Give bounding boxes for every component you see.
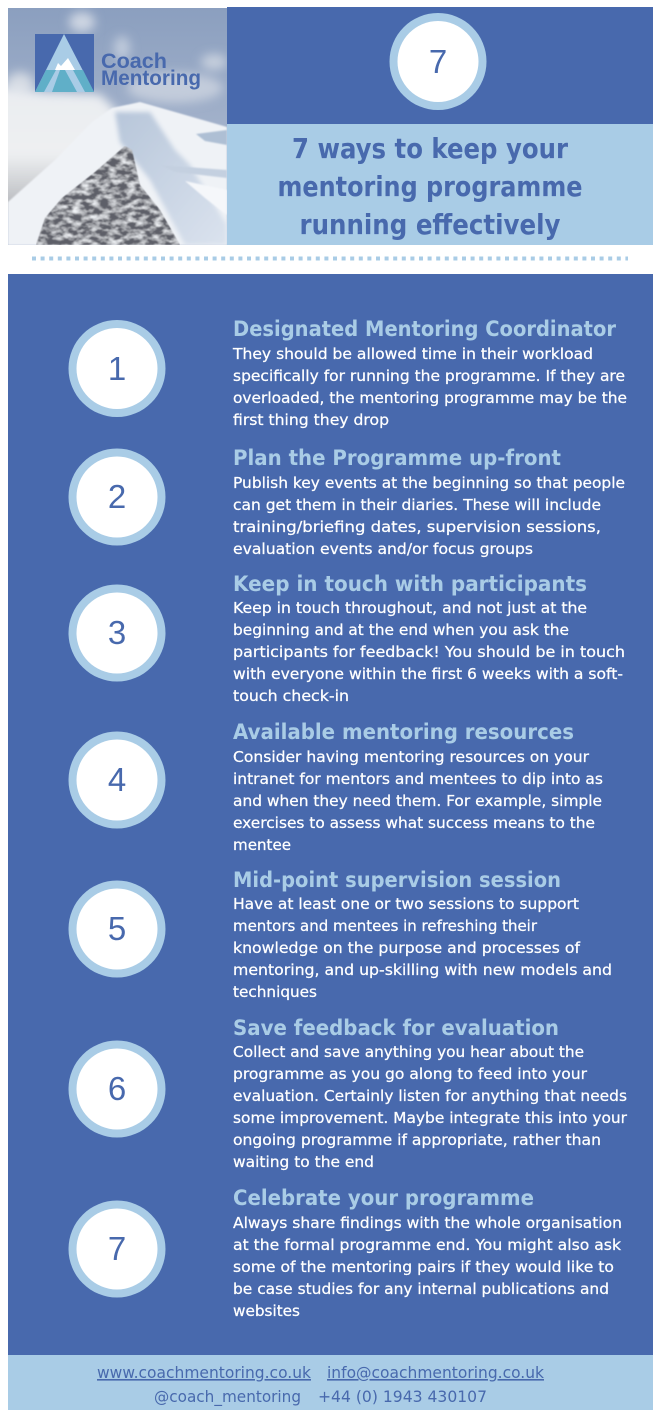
item 2 [68, 446, 625, 558]
item 1: They should be allowed time in their workload [232, 345, 593, 363]
item 2: Publish key events at the beginning so that people [233, 474, 625, 492]
item 1: specifically for running the programme. If they are [233, 367, 625, 385]
logo: Coach Mentoring [35, 34, 201, 92]
logo mark [35, 34, 94, 92]
item 7: Always share findings with the whole organisation [233, 1214, 622, 1232]
item 3: Keep in touch with participants [233, 572, 587, 597]
item 6: evaluation. Certainly listen for anything that needs [233, 1087, 627, 1105]
item 7: Celebrate your programme [233, 1186, 534, 1211]
item 4: Available mentoring resources [233, 720, 574, 745]
footer contacts: info@coachmentoring.co.uk [327, 1363, 545, 1382]
logo wordmark: Mentoring [101, 67, 201, 90]
logo wordmark [101, 50, 201, 90]
item 1: overloaded, the mentoring programme may be the [233, 389, 627, 407]
item 6: some improvement. Maybe integrate this into your [233, 1109, 628, 1127]
item 7: at the formal programme end. You might also ask [233, 1236, 621, 1254]
item 1 [68, 317, 627, 429]
item 3: touch check-in [233, 687, 349, 705]
logo wordmark: Coach [101, 50, 167, 73]
item 5 [68, 868, 612, 1001]
item 5: knowledge on the purpose and processes of [233, 939, 581, 957]
item 6: Save feedback for evaluation [233, 1016, 559, 1041]
item 6: waiting to the end [233, 1153, 374, 1171]
footer contacts: +44 (0) 1943 430107 [318, 1387, 487, 1406]
item 1: first thing they drop [233, 411, 389, 429]
header band: dark blue with number badge [227, 7, 653, 124]
footer contacts: www.coachmentoring.co.uk [97, 1363, 312, 1382]
item 5: Have at least one or two sessions to support [233, 895, 579, 913]
item 7: be case studies for any internal publications and [233, 1280, 609, 1298]
item 6: Collect and save anything you hear about the [233, 1043, 584, 1061]
item 7: 7 [108, 1230, 126, 1267]
item 3: Keep in touch throughout, and not just at the [233, 599, 587, 617]
item 7: some of the mentoring pairs if they would like to [233, 1258, 614, 1276]
item 3: with everyone within the first 6 weeks with a soft- [233, 665, 623, 683]
header band: dark blue with number badge: 7 [429, 43, 447, 80]
title panel: mentoring programme [278, 171, 582, 203]
title panel: running effectively [300, 209, 561, 241]
item 5: mentoring, and up-skilling with new models and [233, 961, 612, 979]
title panel [227, 124, 653, 245]
item 4 [68, 720, 603, 854]
item 3: participants for feedback! You should be in touch [233, 643, 625, 661]
item 4: exercises to assess what success means to the [233, 814, 595, 832]
item 2: evaluation events and/or focus groups [233, 540, 533, 558]
item 2: training/briefing dates, supervision sessions, [233, 518, 601, 536]
item 5: Mid-point supervision session [233, 868, 561, 893]
item 4: Consider having mentoring resources on your [233, 748, 590, 766]
item 4: and when they need them. For example, simple [233, 792, 602, 810]
item 4: mentee [233, 836, 291, 854]
footer contacts [8, 1355, 653, 1410]
footer contacts: @coach_mentoring [154, 1387, 301, 1407]
item 5: mentors and mentees in refreshing their [233, 917, 538, 935]
item 1: 1 [108, 350, 126, 387]
item 6: ongoing programme if appropriate, rather than [233, 1131, 601, 1149]
item 5: 5 [108, 910, 126, 947]
item 5: techniques [233, 983, 317, 1001]
item 6 [68, 1016, 628, 1171]
item 2: Plan the Programme up-front [233, 446, 561, 471]
item 7: websites [233, 1302, 300, 1320]
header photo: snowy mountain [0, 8, 227, 245]
item 4: intranet for mentors and mentees to dip into as [233, 770, 603, 788]
item 6: programme as you go along to feed into your [233, 1065, 588, 1083]
item 6: 6 [108, 1070, 126, 1107]
item 2: can get them in their diaries. These will include [233, 496, 601, 514]
item 3: beginning and at the end when you ask the [233, 621, 569, 639]
item 1: Designated Mentoring Coordinator [233, 317, 616, 342]
title panel: 7 ways to keep your [292, 133, 568, 165]
item 3 [68, 572, 625, 705]
main panel [8, 274, 653, 1355]
item 2: 2 [108, 478, 126, 515]
item 4: 4 [108, 761, 126, 798]
item 7 [68, 1186, 622, 1320]
item 3: 3 [108, 614, 126, 651]
